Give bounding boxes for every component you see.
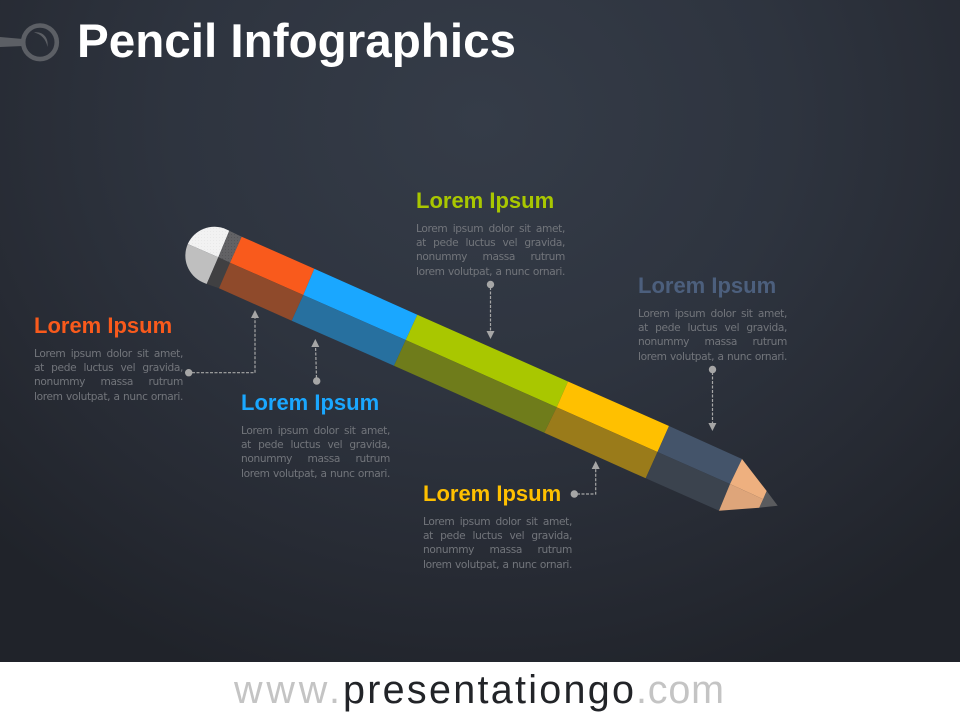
heading: navy: Lorem Ipsum <box>638 273 776 298</box>
connector: yellow <box>571 461 600 498</box>
body text: navy: at pede luctus vel gravida, <box>638 322 787 334</box>
text block: navy <box>638 273 787 363</box>
body text: orange: lorem volutpat, a nunc ornari. <box>34 391 183 403</box>
body text: blue: Lorem ipsum dolor sit amet, <box>241 424 390 436</box>
body text: orange: at pede luctus vel gravida, <box>34 362 183 374</box>
body text: yellow <box>423 516 572 571</box>
connector: orange <box>185 310 259 376</box>
heading: blue: Lorem Ipsum <box>241 390 379 415</box>
text block: orange <box>34 313 183 403</box>
body text: navy: nonummy massa rutrum <box>638 336 787 348</box>
heading: green: Lorem Ipsum <box>416 188 554 213</box>
pencil segment: yellow <box>544 382 669 478</box>
body text: green: nonummy massa rutrum <box>416 251 565 263</box>
text block: green <box>416 188 565 278</box>
title: Pencil Infographics <box>77 15 516 68</box>
body text: blue: lorem volutpat, a nunc ornari. <box>241 468 390 480</box>
icon: magnifier logo <box>0 23 59 62</box>
body text: yellow: at pede luctus vel gravida, <box>423 530 572 542</box>
pencil segment: blue <box>292 269 417 366</box>
pencil segment: green <box>394 315 568 433</box>
footer bar with website: .com <box>636 668 724 712</box>
heading: yellow: Lorem Ipsum <box>423 481 561 506</box>
body text: blue: at pede luctus vel gravida, <box>241 439 390 451</box>
ferrule band <box>207 231 242 288</box>
body text: green <box>416 222 565 278</box>
body text: orange: nonummy massa rutrum <box>34 376 183 388</box>
body text: orange: Lorem ipsum dolor sit amet, <box>34 348 183 360</box>
body text: blue <box>241 424 390 480</box>
body text: yellow: Lorem ipsum dolor sit amet, <box>423 516 572 528</box>
body text: green: at pede luctus vel gravida, <box>416 237 565 249</box>
body text: navy <box>638 308 787 363</box>
footer bar with website: www. <box>233 668 340 712</box>
connector: navy <box>708 366 716 431</box>
text block: yellow <box>423 481 572 571</box>
body text: green: Lorem ipsum dolor sit amet, <box>416 222 565 234</box>
body text: orange <box>34 348 183 403</box>
pencil segment: navy <box>646 426 742 511</box>
pencil tip <box>719 459 778 511</box>
connector: green <box>486 281 494 339</box>
body text: navy: Lorem ipsum dolor sit amet, <box>638 308 787 320</box>
body text: yellow: lorem volutpat, a nunc ornari. <box>423 559 572 571</box>
footer bar with website <box>0 662 960 720</box>
eraser <box>185 227 229 284</box>
body text: blue: nonummy massa rutrum <box>241 453 390 465</box>
pencil segment: orange <box>219 237 314 321</box>
body text: yellow: nonummy massa rutrum <box>423 544 572 556</box>
body text: green: lorem volutpat, a nunc ornari. <box>416 266 565 278</box>
connector: blue <box>311 339 320 385</box>
footer bar with website: presentationgo <box>343 668 634 712</box>
body text: navy: lorem volutpat, a nunc ornari. <box>638 351 787 363</box>
text block: blue <box>241 390 390 480</box>
heading: orange: Lorem Ipsum <box>34 313 172 338</box>
